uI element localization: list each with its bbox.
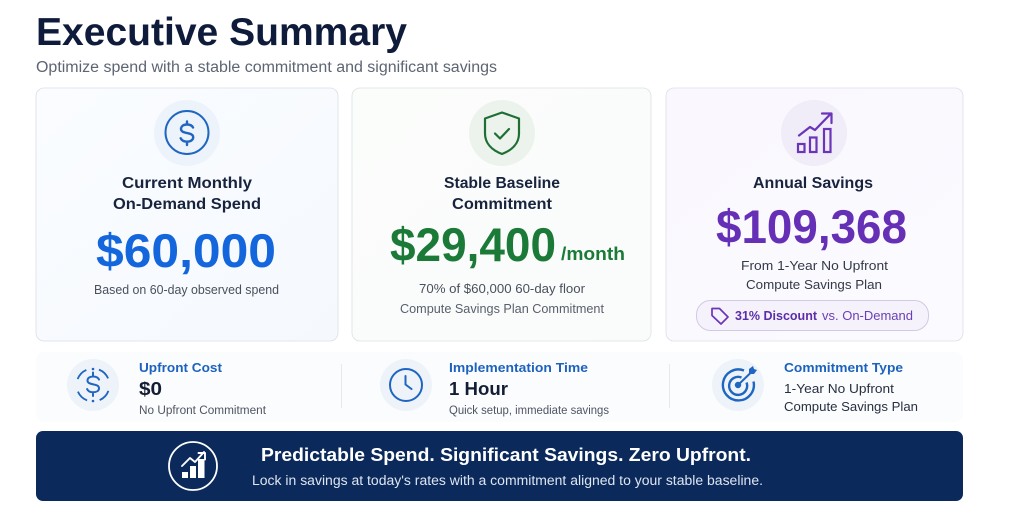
discount pill: vs. On-Demand <box>822 308 913 323</box>
icon: dashed dollar <box>67 359 119 411</box>
big number: $60,000 <box>96 224 276 277</box>
card heading <box>444 175 560 213</box>
panel: key facts strip <box>36 352 963 422</box>
fact: upfront cost <box>67 359 267 417</box>
icon: growth chart <box>169 442 217 490</box>
panel: stable baseline commitment <box>352 88 651 341</box>
card note: Compute Savings Plan <box>746 277 882 292</box>
card note <box>400 282 605 316</box>
fact: commitment type: Compute Savings Plan <box>784 399 918 414</box>
fact: commitment type <box>712 359 918 414</box>
banner headline: Predictable Spend. Significant Savings. Zero Upfront. <box>261 444 751 465</box>
discount pill <box>696 300 928 330</box>
fact: implementation time: 1 Hour <box>449 379 508 399</box>
fact: upfront cost: No Upfront Commitment <box>139 405 267 417</box>
discount pill: 31% Discount <box>735 308 818 323</box>
icon: dollar circle <box>154 100 220 166</box>
card heading <box>113 175 261 213</box>
card heading: On-Demand Spend <box>113 196 261 213</box>
card heading: Commitment <box>452 196 552 213</box>
card note: From 1-Year No Upfront <box>741 258 888 273</box>
icon: price tag <box>712 308 728 324</box>
title: Executive Summary <box>36 11 407 54</box>
card heading: Annual Savings <box>753 175 873 192</box>
big number: /month <box>561 244 625 264</box>
icon: target <box>712 359 764 411</box>
card note: Compute Savings Plan Commitment <box>400 302 605 316</box>
fact: implementation time: Quick setup, immediate savings <box>449 405 609 417</box>
icon: rising bars <box>781 100 847 166</box>
icon: clock <box>380 359 432 411</box>
fact: implementation time <box>380 359 609 417</box>
banner subtext: Lock in savings at today's rates with a commitment aligned to your stable baseline. <box>252 473 763 488</box>
card note <box>741 258 888 292</box>
card note: 70% of $60,000 60-day floor <box>419 282 585 296</box>
card note: Based on 60-day observed spend <box>94 283 279 297</box>
subtitle: Optimize spend with a stable commitment and significant savings <box>36 59 497 76</box>
fact: upfront cost: $0 <box>139 379 162 399</box>
banner <box>36 431 963 501</box>
icon: shield check <box>469 100 535 166</box>
fact: implementation time: Implementation Time <box>449 360 588 375</box>
fact: upfront cost: Upfront Cost <box>139 360 223 375</box>
card heading: Current Monthly <box>122 175 252 192</box>
big number: $29,400 <box>390 218 556 271</box>
panel: current monthly on-demand spend <box>36 88 338 341</box>
fact: commitment type: 1-Year No Upfront <box>784 381 894 396</box>
big number: $109,368 <box>716 200 907 253</box>
fact: commitment type: Commitment Type <box>784 360 903 375</box>
panel: annual savings <box>666 88 963 341</box>
card heading: Stable Baseline <box>444 175 560 192</box>
